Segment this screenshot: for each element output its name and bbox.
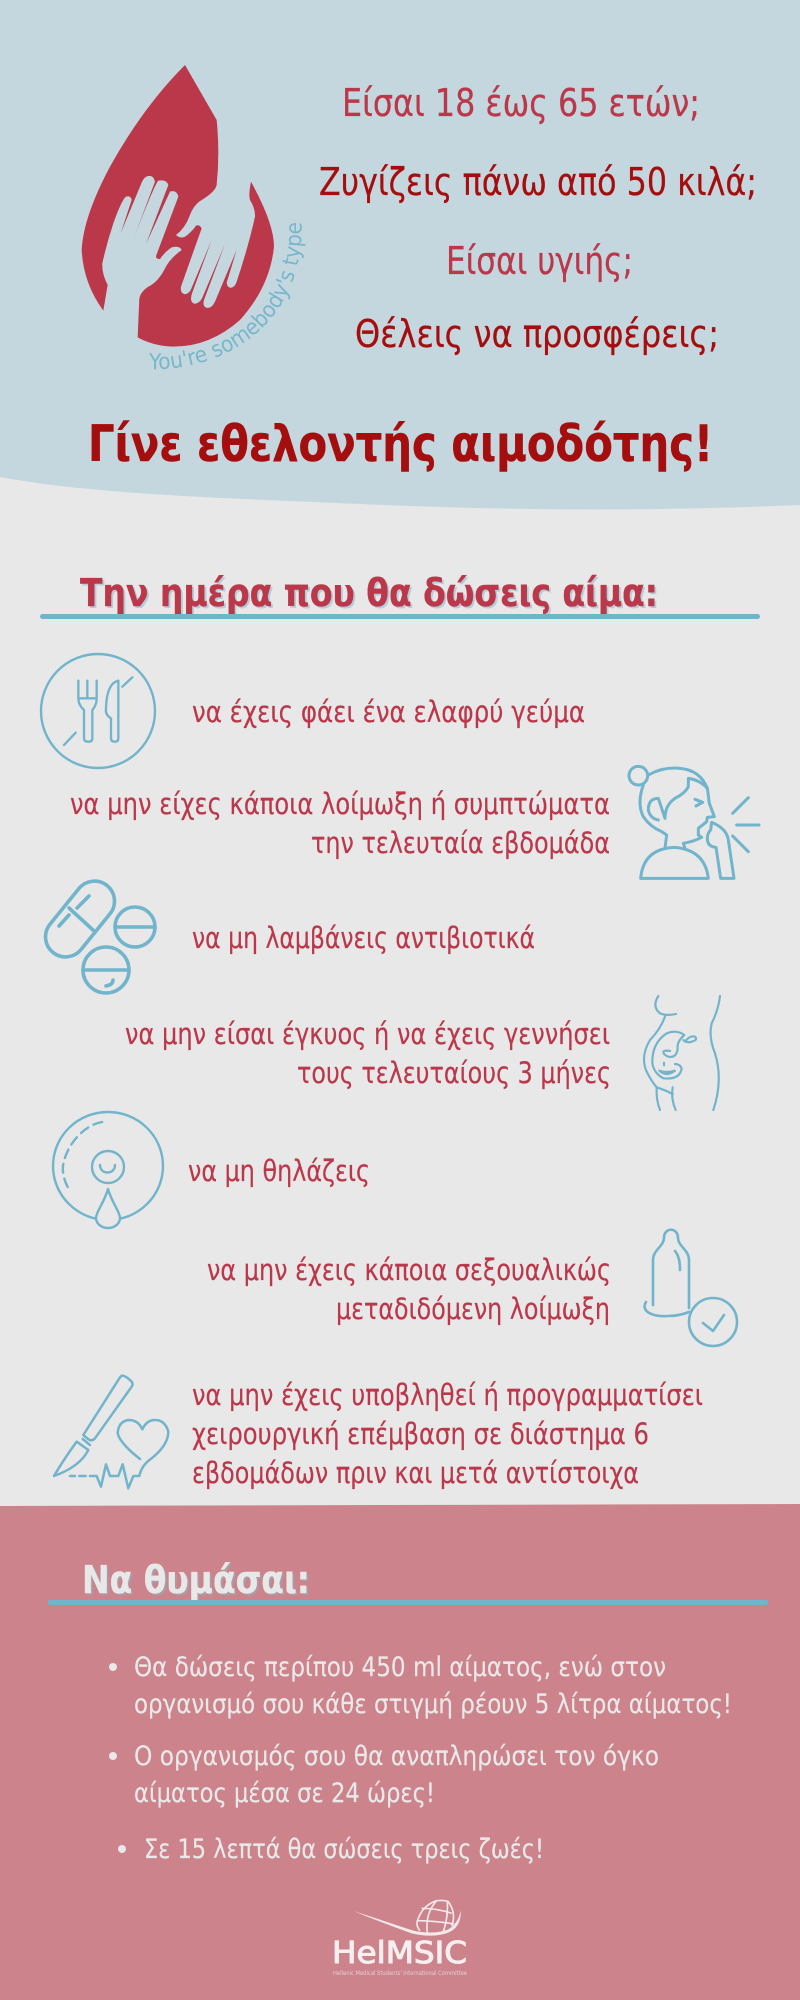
question: health: Είσαι υγιής; <box>446 239 633 284</box>
bullet: 24 hours <box>109 1741 659 1809</box>
text: no surgery: χειρουργική επέμβαση σε διάστημα 6 <box>192 1417 649 1451</box>
text: no STI <box>207 1253 611 1326</box>
tagline: You're somebody's type: You're somebody's type <box>149 223 306 370</box>
icon: pregnant body <box>644 996 720 1110</box>
heading: remember: Να θυμάσαι: <box>84 1560 312 1604</box>
icon: condom with check <box>645 1230 737 1346</box>
bullet: three lives: Σε 15 λεπτά θα σώσεις τρεις ζωές! <box>144 1834 544 1865</box>
bullet: 450 ml <box>109 1652 732 1720</box>
panel: remember section <box>0 1504 800 2000</box>
question: age: Είσαι 18 έως 65 ετών; <box>342 81 700 126</box>
panel: top question section <box>0 0 800 510</box>
text: not pregnant: να μην είσαι έγκυος ή να έχεις γεννήσει <box>125 1017 610 1051</box>
logo: blood drop with hands <box>82 65 306 370</box>
question: willingness: Θέλεις να προσφέρεις; <box>355 312 719 357</box>
text: no surgery <box>192 1378 703 1490</box>
text: no surgery: να μην έχεις υποβληθεί ή προγραμματίσει <box>192 1378 703 1412</box>
icon: fork and knife <box>41 654 155 768</box>
text: no antibiotics: να μη λαμβάνεις αντιβιοτικά <box>192 921 535 955</box>
text: light meal: να έχεις φάει ένα ελαφρύ γεύμα <box>192 695 585 729</box>
bullet: 450 ml: Θα δώσεις περίπου 450 ml αίματος, ενώ στον <box>134 1652 666 1683</box>
logo: HelMSIC <box>332 1900 467 1977</box>
text: no surgery: εβδομάδων πριν και μετά αντίστοιχα <box>192 1456 639 1490</box>
heading: remember: Να θυμάσαι: <box>82 1558 310 1602</box>
logo: HelMSIC: Hellenic Medical Students' International Committee <box>333 1970 467 1977</box>
icon: pills <box>37 873 155 993</box>
bullet: 24 hours: αίματος μέσα σε 24 ώρες! <box>134 1778 435 1809</box>
icon: breast with drop <box>53 1112 163 1228</box>
text: no infection <box>70 787 610 860</box>
text: no infection: την τελευταία εβδομάδα <box>311 826 610 860</box>
heading: donation day: Την ημέρα που θα δώσεις αίμα: <box>82 573 660 617</box>
heading: remember <box>48 1558 768 1605</box>
text: not pregnant: τους τελευταίους 3 μήνες <box>297 1056 611 1090</box>
logo: HelMSIC: HelMSIC <box>332 1936 467 1971</box>
text: not pregnant <box>125 1017 611 1090</box>
text: no STI: να μην έχεις κάποια σεξουαλικώς <box>207 1253 611 1287</box>
bullet: 24 hours: Ο οργανισμός σου θα αναπληρώσει τον όγκο <box>134 1741 659 1772</box>
text: not breastfeeding: να μη θηλάζεις <box>188 1154 370 1188</box>
text: no STI: μεταδιδόμενη λοίμωξη <box>336 1292 610 1326</box>
text: no infection: να μην είχες κάποια λοίμωξη ή συμπτώματα <box>70 787 610 821</box>
icon: coughing person <box>629 766 759 878</box>
icon: scalpel and heart <box>54 1376 168 1488</box>
heading: donation day: Την ημέρα που θα δώσεις αίμα: <box>80 571 658 615</box>
